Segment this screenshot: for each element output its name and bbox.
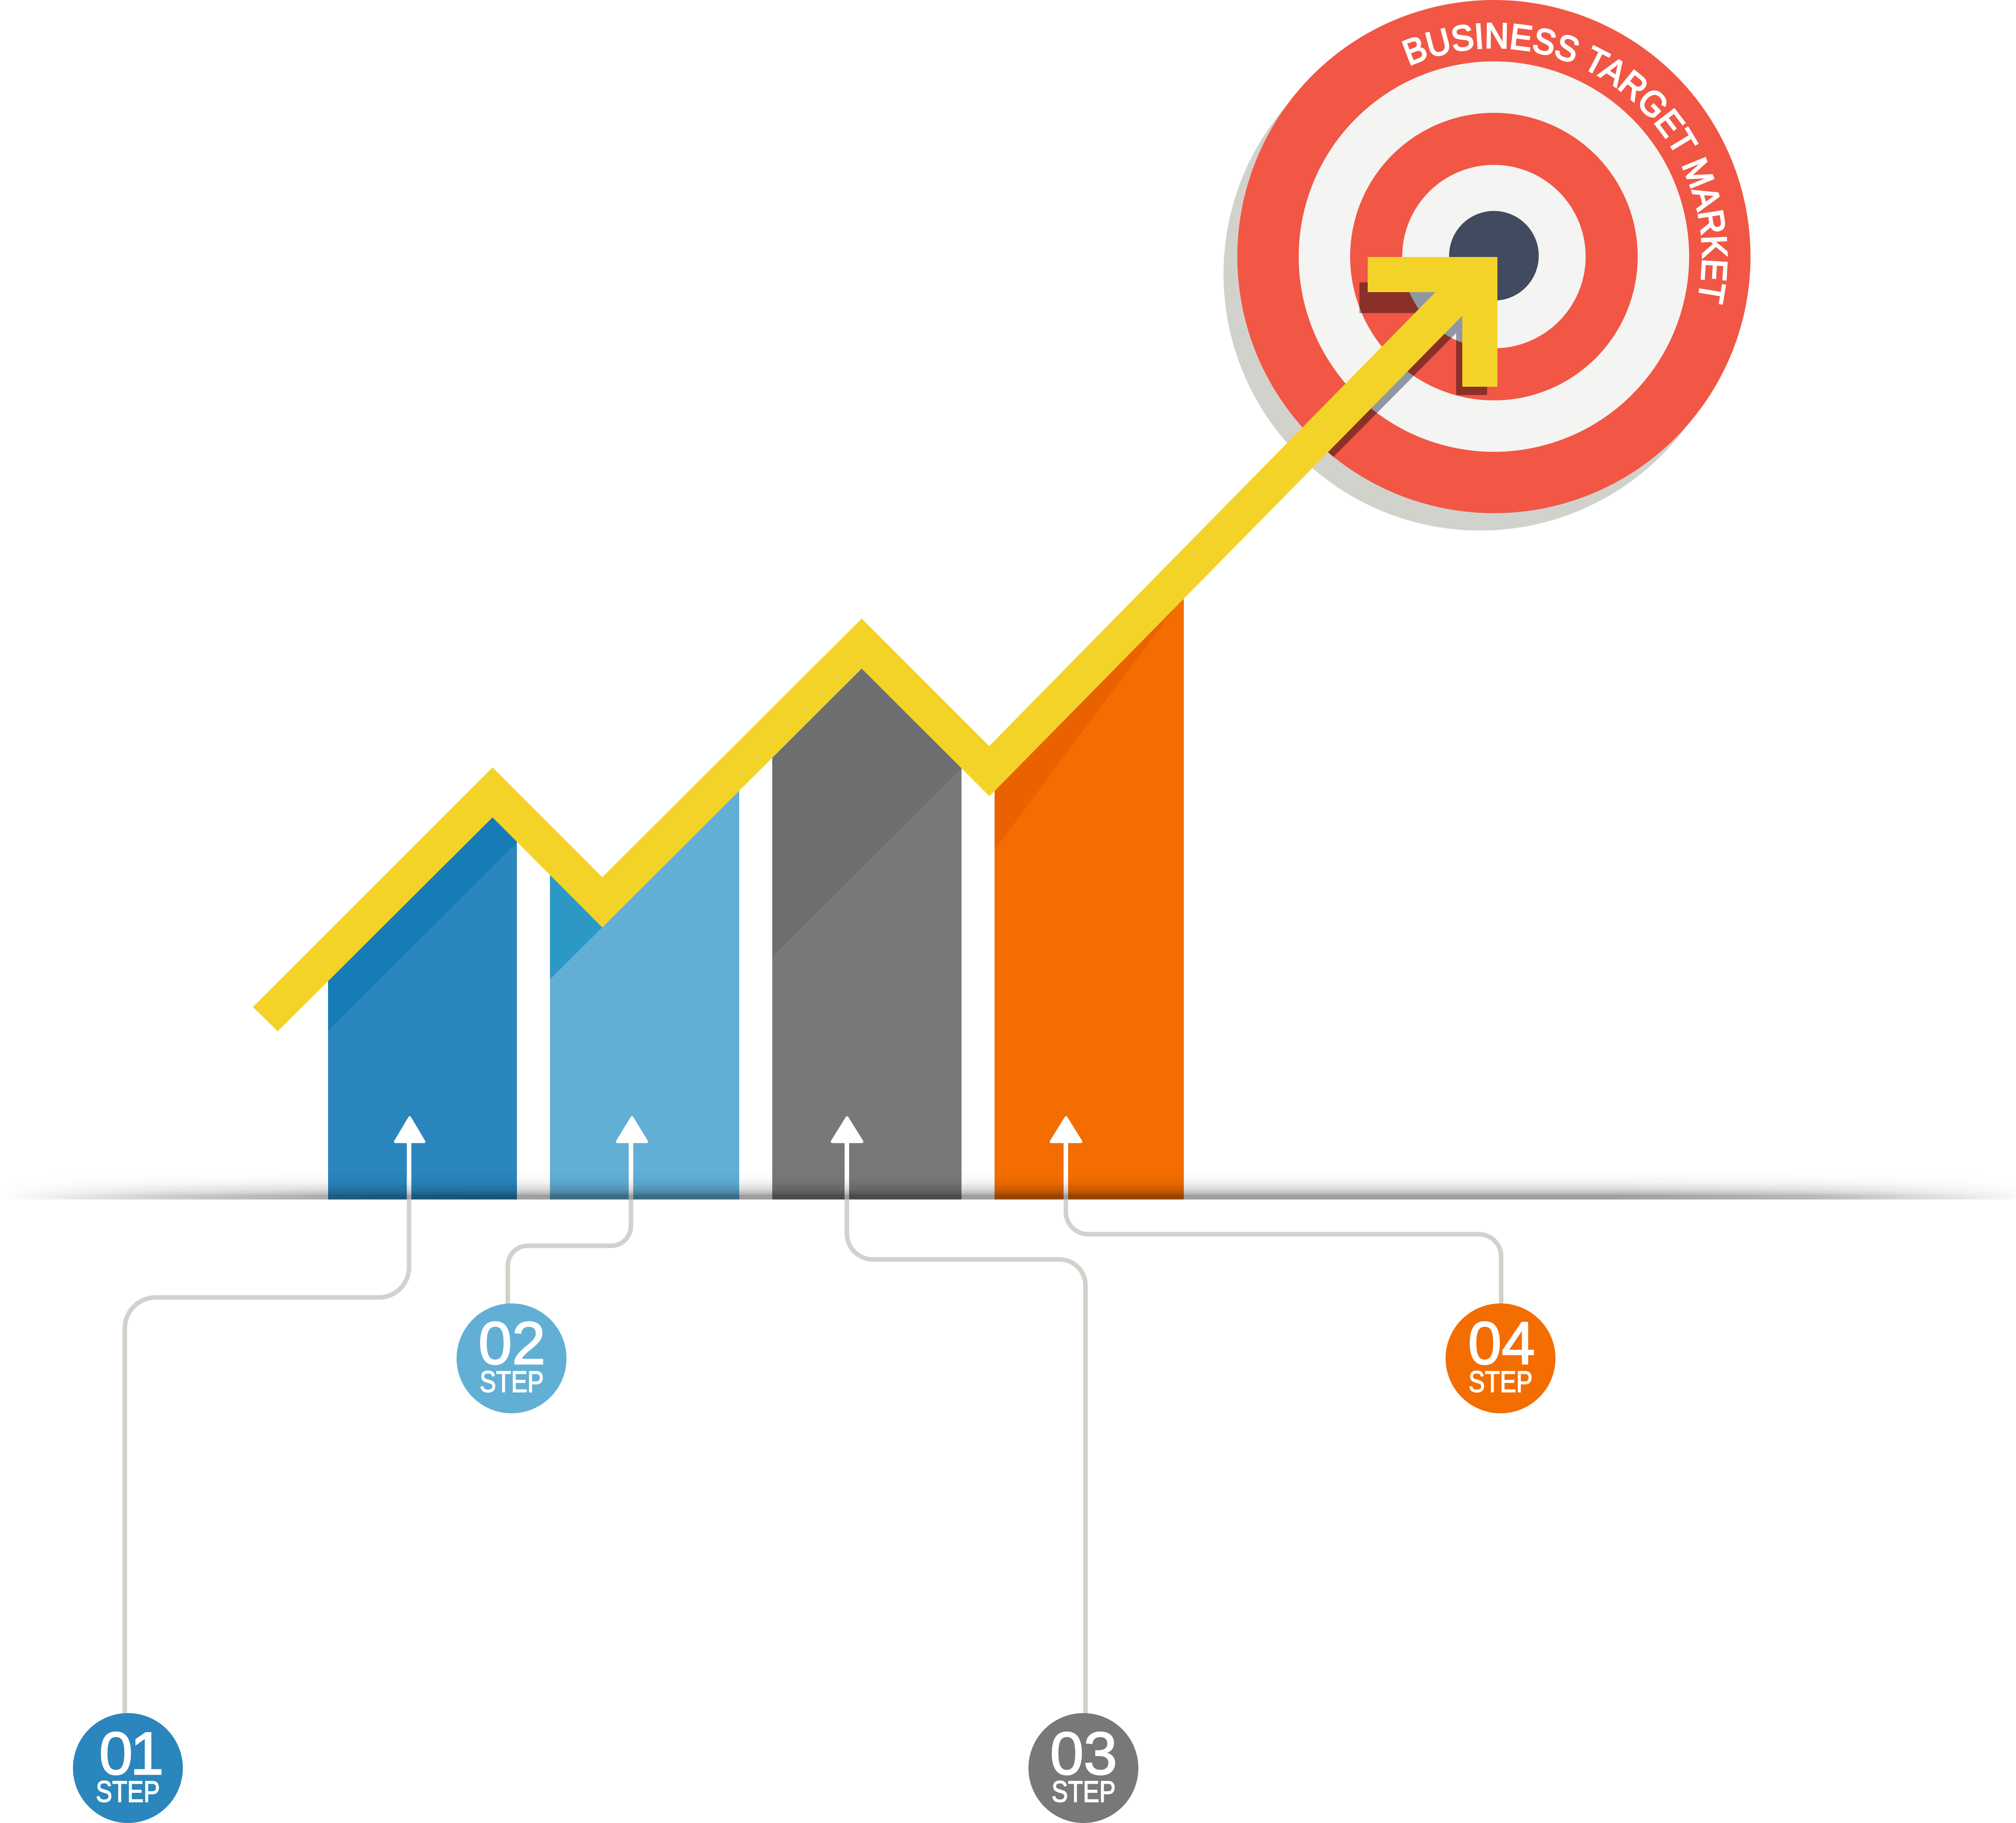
bar 4 orange bbox=[995, 599, 1184, 1199]
target white ring bbox=[1299, 61, 1689, 452]
step 04 badge: STEP bbox=[1469, 1366, 1533, 1399]
yellow growth arrow bbox=[253, 257, 1497, 1031]
arrow shadow on target bbox=[1328, 283, 1487, 457]
connector 3 with arrowhead bbox=[832, 1118, 1085, 1719]
step 03 badge bbox=[1028, 1713, 1138, 1823]
floor shadow bbox=[29, 1180, 2007, 1199]
step 03 badge: STEP bbox=[1052, 1775, 1116, 1809]
step 04 badge: 04 bbox=[1468, 1309, 1535, 1377]
step 01 badge: STEP bbox=[96, 1775, 160, 1809]
bar 1 blue bbox=[328, 817, 517, 1199]
step 01 badge: 01 bbox=[99, 1720, 164, 1787]
connector 1 with arrowhead bbox=[125, 1118, 424, 1719]
step 02 badge: STEP bbox=[480, 1366, 544, 1399]
step 03 badge: 03 bbox=[1050, 1720, 1117, 1787]
target bullseye bbox=[1449, 211, 1539, 301]
step 01 badge bbox=[73, 1713, 183, 1823]
curved label: BUSINESS TARGET MARKET bbox=[1397, 16, 1735, 306]
target inner white ring bbox=[1402, 165, 1586, 348]
target drop shadow bbox=[1223, 17, 1737, 531]
step 02 badge: 02 bbox=[478, 1309, 545, 1377]
target outer red ring bbox=[1237, 0, 1750, 513]
target: business target market bbox=[1223, 0, 1750, 531]
connector 4 with arrowhead bbox=[1051, 1118, 1501, 1308]
step 04 badge bbox=[1445, 1303, 1555, 1413]
bar 2 light blue bbox=[550, 791, 739, 1199]
bar 3 gray bbox=[772, 669, 962, 1199]
step 02 badge bbox=[457, 1303, 566, 1413]
connector 2 with arrowhead bbox=[508, 1118, 647, 1308]
target inner red ring bbox=[1350, 113, 1638, 400]
